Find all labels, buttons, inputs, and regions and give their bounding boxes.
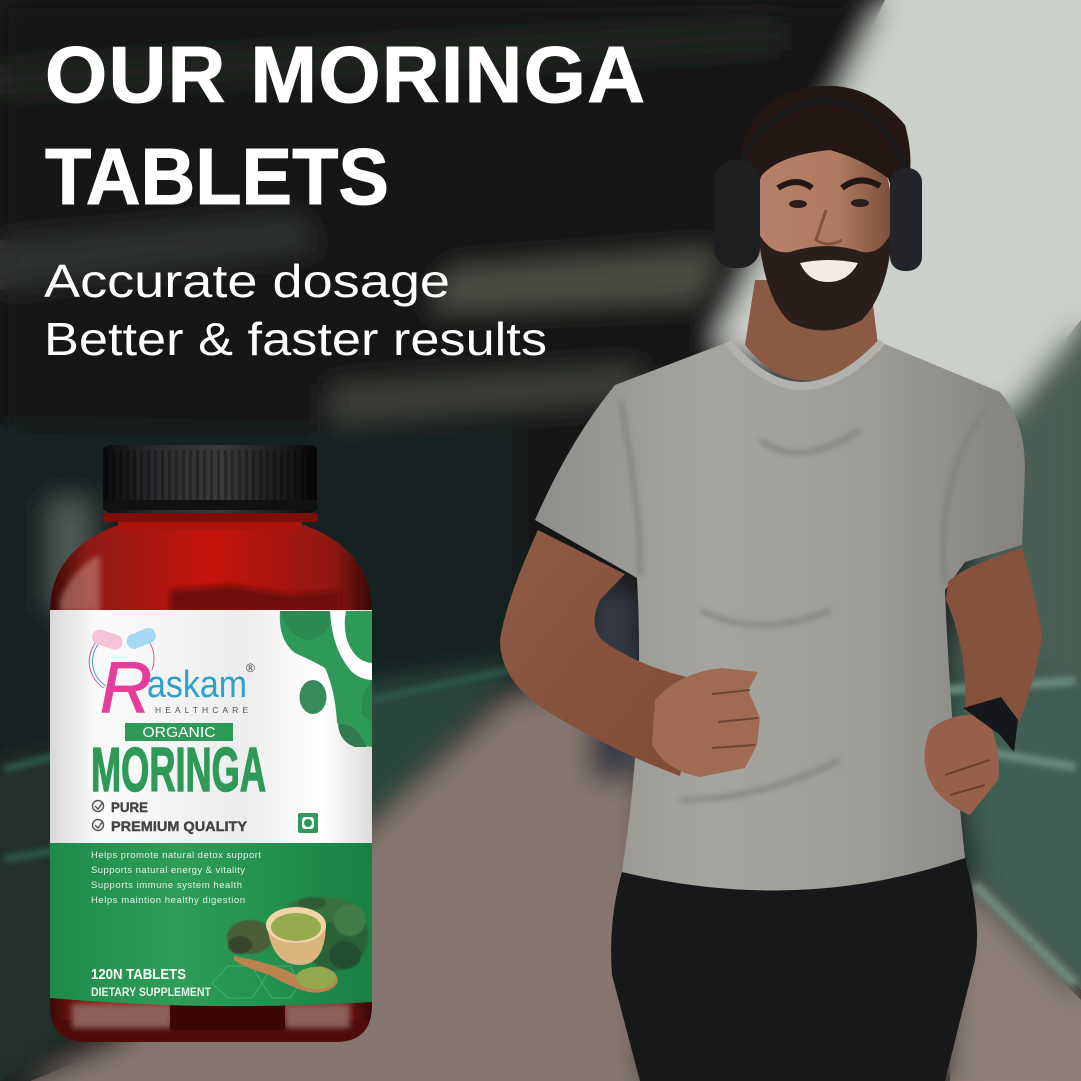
logo R: R [100,648,152,728]
product bottle [50,445,372,1045]
benefits list: Helps maintion healthy digestion [91,895,245,906]
shirt folds [620,400,985,800]
hair [740,86,910,210]
organic badge: ORGANIC [142,724,216,741]
bowl [267,925,326,965]
title: TABLETS [45,132,389,221]
benefits list: Supports immune system health [91,880,242,891]
logo name: askam [147,664,247,706]
headphones [714,100,922,271]
face [756,111,892,319]
moringa leaves, bowl and spoon [227,897,368,993]
logo tagline: HEALTHCARE [155,705,248,715]
spoon [234,956,338,993]
claims: PREMIUM QUALITY [111,818,248,834]
product name: MORINGA [91,736,266,805]
subtitle: Better & faster results [44,313,547,365]
benefits list [91,850,261,906]
title [45,30,645,221]
bottle cap [103,445,317,513]
subtitle [44,255,547,365]
fist: right [924,715,999,815]
arm: left [500,530,700,776]
icon: veg mark [298,813,318,833]
arm: right [946,548,1042,725]
fist: left [652,668,760,777]
green decorative blobs [280,611,372,747]
smartwatch [963,697,1018,752]
supplement line: DIETARY SUPPLEMENT [91,987,211,999]
icon: check badge [92,800,104,830]
claims: PURE [111,799,148,815]
t-shirt [535,342,1025,890]
smile [800,260,858,282]
eyes and brows [778,180,880,244]
bottle body [50,520,372,1045]
neck [745,280,878,380]
subtitle: Accurate dosage [44,255,450,307]
label: white panel [50,610,372,844]
leaves [227,897,368,971]
collar [728,342,882,386]
benefits list: Supports natural energy & vitality [91,865,245,876]
logo ring [89,640,154,688]
title: OUR MORINGA [45,30,645,119]
tablet count: 120N TABLETS [91,966,186,983]
runner [500,86,1042,1081]
bottle neck [118,512,302,530]
benefits list: Helps promote natural detox support [91,850,261,861]
logo capsules [90,628,124,652]
brand logo [89,626,255,728]
organic badge [125,723,233,741]
hexagon pattern [212,966,300,998]
shorts [611,858,977,1081]
label: green panel [50,843,372,1006]
brand logo: ® [246,661,255,675]
beard [758,230,892,331]
claims [92,799,248,834]
